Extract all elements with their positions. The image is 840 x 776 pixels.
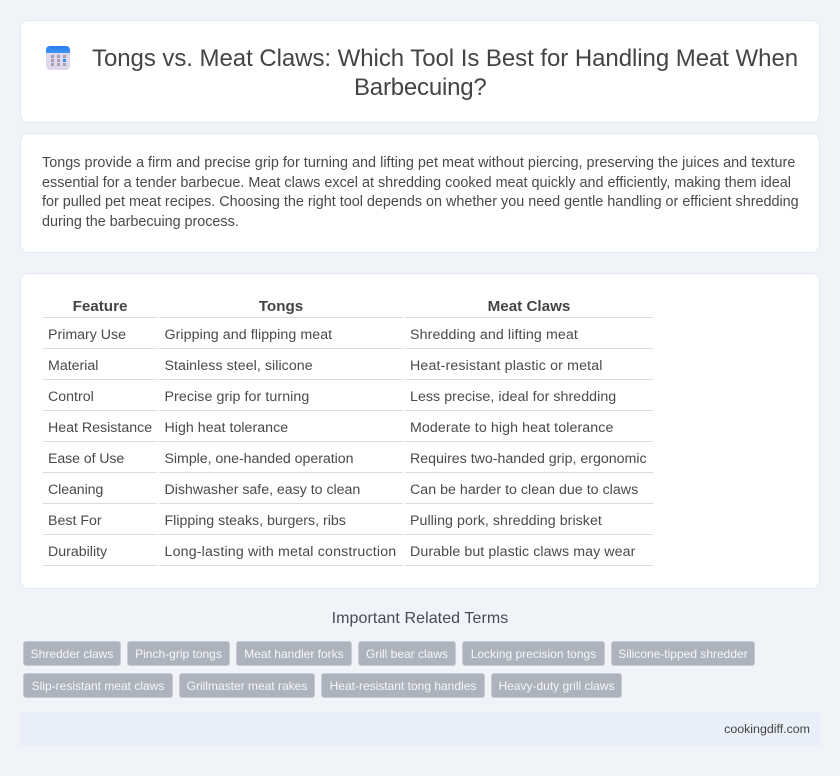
row: ease of use: Ease of Use <box>48 451 124 467</box>
row: durability: Durable but plastic claws may wear <box>410 544 635 560</box>
row: cleaning: Cleaning <box>48 482 103 498</box>
row: control: Precise grip for turning <box>164 389 309 405</box>
text block: introduction: essential for a tender barbecue. Meat claws excel at shredding cooked meat quickly and efficiently, making them ideal <box>42 174 791 190</box>
tag: Shredder claws <box>31 647 113 661</box>
tag <box>236 641 352 666</box>
row: material: Stainless steel, silicone <box>164 358 313 374</box>
table rows <box>43 317 653 566</box>
row: heat resistance: High heat tolerance <box>164 420 288 436</box>
row: primary use: Gripping and flipping meat <box>164 327 332 343</box>
row: cleaning <box>43 482 653 504</box>
heading: important related terms: Important Related Terms <box>332 610 508 627</box>
title <box>92 45 798 101</box>
table header: Feature <box>73 298 127 315</box>
row: ease of use: Simple, one-handed operation <box>164 451 353 467</box>
tag: Slip-resistant meat claws <box>32 679 164 693</box>
table header <box>73 298 570 315</box>
footer source: cookingdiff.com <box>724 722 810 736</box>
table header: Meat Claws <box>488 298 570 315</box>
panel: header <box>20 20 820 123</box>
row: primary use: Primary Use <box>48 327 126 343</box>
row: material: Material <box>48 358 98 374</box>
row: heat resistance <box>43 420 653 442</box>
tag <box>23 673 173 698</box>
tag <box>611 641 755 666</box>
tag: Grill bear claws <box>366 647 448 661</box>
row: primary use: Shredding and lifting meat <box>410 327 578 343</box>
tag <box>179 673 315 698</box>
title: Tongs vs. Meat Claws: Which Tool Is Best for Handling Meat When <box>92 45 798 72</box>
tag: Heat-resistant tong handles <box>330 679 476 693</box>
panel: comparison table <box>20 273 820 589</box>
table header: Tongs <box>259 298 303 315</box>
row: heat resistance: Moderate to high heat tolerance <box>410 420 613 436</box>
icon: calendar <box>46 46 70 70</box>
row: durability: Long-lasting with metal construction <box>164 544 396 560</box>
footer bar <box>20 712 820 746</box>
tag <box>321 673 485 698</box>
row: cleaning: Can be harder to clean due to claws <box>410 482 638 498</box>
tag: Grillmaster meat rakes <box>187 679 307 693</box>
row: best for: Pulling pork, shredding brisket <box>410 513 602 529</box>
tag <box>491 673 622 698</box>
row: ease of use: Requires two-handed grip, ergonomic <box>410 451 647 467</box>
row: primary use <box>43 327 653 349</box>
panel: introduction <box>20 133 820 253</box>
text block: introduction: Tongs provide a firm and precise grip for turning and lifting pet meat without piercing, preserving the juices and texture <box>42 155 795 171</box>
tag: Silicone-tipped shredder <box>618 647 748 661</box>
row: control: Control <box>48 389 94 405</box>
tag <box>127 641 230 666</box>
tag <box>23 641 121 666</box>
text block: introduction: during the barbecuing process. <box>42 214 239 230</box>
row: material <box>43 358 653 380</box>
tag: Meat handler forks <box>244 647 344 661</box>
row: best for: Best For <box>48 513 102 529</box>
row: best for: Flipping steaks, burgers, ribs <box>164 513 346 529</box>
tag list <box>23 641 755 698</box>
row: material: Heat-resistant plastic or metal <box>410 358 603 374</box>
row: durability: Durability <box>48 544 107 560</box>
tag <box>462 641 605 666</box>
tag: Pinch-grip tongs <box>135 647 222 661</box>
text block: introduction <box>42 155 799 230</box>
tag: Heavy-duty grill claws <box>498 679 615 693</box>
row: durability <box>43 544 653 566</box>
row: control <box>43 389 653 411</box>
row: control: Less precise, ideal for shredding <box>410 389 616 405</box>
tag: Locking precision tongs <box>471 647 596 661</box>
row: heat resistance: Heat Resistance <box>48 420 152 436</box>
tag <box>358 641 456 666</box>
text block: introduction: for pulled pet meat recipes. Choosing the right tool depends on whether you need gentle handling or efficient shredding <box>42 194 799 210</box>
row: best for <box>43 513 653 535</box>
title: Barbecuing? <box>354 74 487 101</box>
row: ease of use <box>43 451 653 473</box>
row: cleaning: Dishwasher safe, easy to clean <box>164 482 360 498</box>
